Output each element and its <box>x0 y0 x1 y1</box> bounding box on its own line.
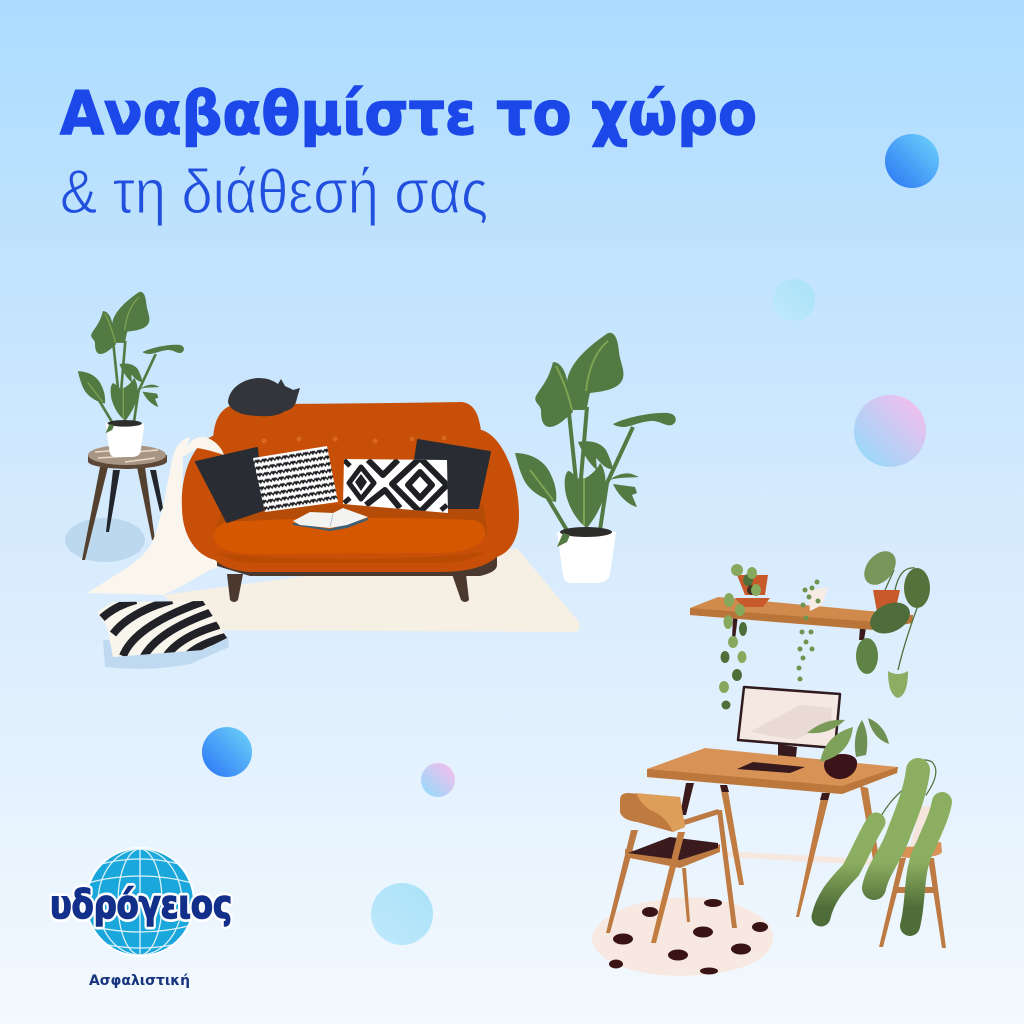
chair <box>606 793 737 943</box>
title <box>60 79 757 227</box>
zigzag cushion <box>253 446 338 512</box>
desk plant <box>807 718 889 779</box>
heading: bold line: Αναβαθμίστε το χώρο <box>60 79 757 149</box>
small potted plant <box>78 292 184 457</box>
dark cushion right <box>415 440 490 508</box>
floor shadow <box>723 851 872 865</box>
large potted plant <box>515 333 676 583</box>
spotted rug <box>592 897 773 976</box>
sofa <box>182 378 519 602</box>
blanket <box>87 437 225 595</box>
heading: light line: & τη διάθεσή σας <box>60 158 488 227</box>
open book <box>293 508 368 530</box>
logo: Hydrogeios insurance <box>50 847 232 989</box>
logo wordmark fill: υδρόγειος <box>50 883 232 928</box>
dark cushion left <box>196 448 263 522</box>
seat cushion <box>214 518 485 554</box>
illustration: living room <box>65 292 676 669</box>
plant on stool <box>821 760 942 926</box>
illustration: desk corner <box>592 545 946 976</box>
diamond cushion <box>343 459 448 513</box>
stool <box>879 842 946 948</box>
striped floor cushion <box>97 600 229 669</box>
monitor <box>738 687 840 760</box>
terracotta pot <box>735 575 770 607</box>
logo tagline: Ασφαλιστική <box>89 973 190 989</box>
trailing vine left <box>719 564 761 710</box>
logo wordmark: υδρόγειος <box>50 883 232 928</box>
decorative bubbles <box>202 134 939 945</box>
heart-leaf plant <box>856 545 930 698</box>
desk <box>647 718 898 917</box>
rug <box>163 548 580 632</box>
globe <box>84 847 196 957</box>
keyboard <box>737 762 805 773</box>
trailing vine middle <box>796 580 828 682</box>
blanket drape over the arm <box>183 437 224 457</box>
wall shelf with plants <box>690 545 930 710</box>
side table <box>65 445 167 562</box>
sleeping cat <box>228 378 300 416</box>
